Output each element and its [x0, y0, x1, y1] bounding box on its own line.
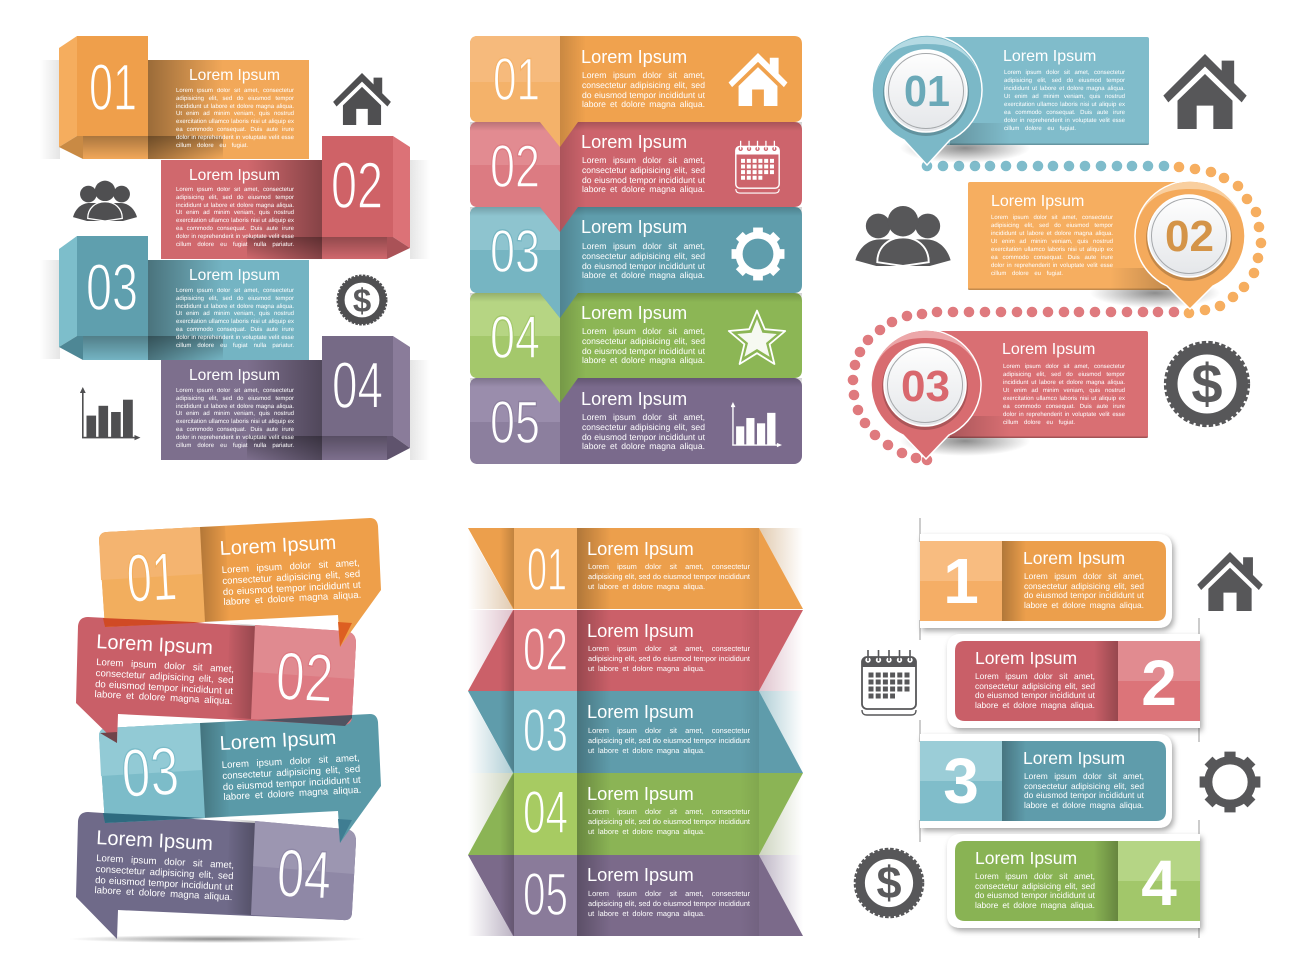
body text: do eiusmod tempor incididunt ut: [582, 346, 705, 356]
number 1: 1: [943, 545, 979, 617]
icon: coin: $: [1191, 352, 1223, 415]
body text: [588, 644, 750, 676]
body text: [222, 754, 362, 807]
title: Lorem Ipsum: [587, 783, 694, 804]
body text: [94, 658, 234, 711]
body text: dolor in reprehenderit in voluptate velit esse: [176, 234, 294, 240]
body text: incididunt ut labore et dolore magna aliqua.: [176, 304, 294, 310]
panel: location pins with dotted path, top right: [848, 35, 1266, 465]
body text: consectetur adipisicing elit, sed: [1024, 781, 1144, 791]
body text: [588, 562, 750, 594]
body text: consectetur adipisicing elit, sed: [975, 681, 1095, 691]
title: Lorem Ipsum: [219, 727, 337, 755]
body text: [176, 88, 294, 154]
title: Lorem Ipsum: [1002, 341, 1095, 358]
body text: ea commodo consequat. Duis aute irure: [991, 255, 1113, 261]
title: Lorem Ipsum: [96, 827, 213, 855]
title: Lorem Ipsum: [581, 47, 687, 67]
card 03: [871, 330, 1148, 459]
body text: incididunt ut labore et dolore magna aliqua.: [1003, 380, 1125, 386]
tab 05: [470, 378, 802, 464]
body text: dolor in reprehenderit in voluptate velit esse: [1004, 118, 1125, 124]
body text: ea commodo consequat. Duis aute irure: [1004, 110, 1125, 116]
number 01: 01: [527, 536, 567, 603]
body text: consectetur adipisicing elit, sed: [582, 422, 705, 432]
body text: consectetur adipisicing elit, sed: [975, 881, 1095, 891]
body text: ut labore et dolore magna aliqua.: [588, 664, 705, 673]
body text: [991, 214, 1113, 282]
tab 02: [470, 122, 802, 232]
number 3: 3: [943, 745, 979, 817]
ribbon 02: [468, 610, 803, 691]
body text: cillum dolore eu fugiat nulla pariatur.: [176, 343, 294, 349]
title: Lorem Ipsum: [581, 389, 687, 409]
title: Lorem Ipsum: [219, 532, 337, 560]
number 02: 02: [523, 616, 568, 683]
pin 01: 01: [904, 67, 950, 116]
body text: ut labore et dolore magna aliqua.: [588, 746, 705, 755]
body text: [975, 872, 1095, 914]
body text: Ut enim ad minim veniam, quis nostrud: [991, 239, 1113, 245]
tab 4: [947, 834, 1200, 928]
title: Lorem Ipsum: [587, 620, 694, 641]
tab 1: [920, 534, 1172, 628]
body text: labore et dolore magna aliqua.: [582, 355, 705, 365]
number 04: 04: [523, 779, 568, 846]
body text: consectetur adipisicing elit, sed: [222, 569, 360, 587]
body text: labore et dolore magna aliqua.: [1024, 800, 1144, 810]
body text: ea commodo consequat. Duis aute irure: [176, 226, 294, 232]
tab 04: [470, 293, 802, 403]
icon: house: [729, 53, 787, 106]
icon: coin: [337, 275, 387, 325]
dotted path: [848, 161, 1266, 465]
body text: consectetur adipisicing elit, sed: [582, 80, 705, 90]
body text: ut labore et dolore magna aliqua.: [588, 909, 705, 918]
body text: labore et dolore magna aliqua.: [94, 885, 233, 904]
body text: consectetur adipisicing elit, sed: [582, 165, 705, 175]
body text: exercitation ullamco laboris nisi ut aliquip ex: [1003, 396, 1125, 402]
icon: people: [73, 181, 137, 221]
body text: incididunt ut labore et dolore magna aliqua.: [176, 404, 294, 410]
ribbon 03: [468, 691, 803, 773]
body text: adipisicing elit, sed do eiusmod tempor: [176, 195, 294, 201]
body text: cillum dolore eu fugiat.: [991, 271, 1063, 277]
ribbon 01: [468, 528, 803, 609]
body text: Lorem ipsum dolor sit amet, consectetur: [588, 807, 750, 816]
tab 01: [470, 36, 802, 147]
body text: ut labore et dolore magna aliqua.: [588, 827, 705, 836]
tab 03: [470, 207, 802, 318]
body text: [1003, 363, 1125, 431]
icon: people: [855, 206, 951, 266]
bubble 04: [76, 812, 356, 939]
body text: [588, 726, 750, 758]
body text: Lorem ipsum dolor sit amet, consectetur: [176, 288, 294, 294]
panel: origami banners, top left: [40, 36, 430, 460]
number 2: 2: [1141, 647, 1177, 719]
pin 02: 02: [1165, 212, 1214, 261]
title: Lorem Ipsum: [189, 67, 280, 84]
icon: star: [729, 311, 785, 364]
title: Lorem Ipsum: [991, 193, 1084, 210]
body text: adipisicing elit, sed do eiusmod tempor incididunt: [588, 899, 750, 908]
title: Lorem Ipsum: [1003, 48, 1096, 65]
body text: do eiusmod tempor incididunt ut: [1024, 790, 1144, 800]
icon: calendar: [862, 650, 916, 715]
title: Lorem Ipsum: [1023, 748, 1125, 768]
body text: labore et dolore magna aliqua.: [582, 441, 705, 451]
body text: do eiusmod tempor incididunt ut: [975, 690, 1095, 700]
body text: labore et dolore magna aliqua.: [582, 184, 705, 194]
icon: coin: $: [353, 282, 371, 319]
icon: gear: [732, 228, 784, 280]
tab 3: [920, 734, 1172, 828]
body text: adipisicing elit, sed do eiusmod tempor incididunt: [588, 572, 750, 581]
pin 03: [871, 330, 981, 459]
body text: [1024, 772, 1144, 814]
ribbon 04: [468, 773, 803, 855]
body text: Lorem ipsum dolor sit amet, consectetur: [588, 889, 750, 898]
number 01: 01: [493, 46, 540, 113]
banner 03: [40, 236, 309, 360]
body text: exercitation ullamco laboris nisi ut aliquip ex: [176, 218, 294, 224]
number 02: 02: [490, 133, 540, 200]
number 02: 02: [331, 148, 383, 222]
body text: do eiusmod tempor incididunt ut: [95, 679, 233, 697]
banner 02: [161, 136, 430, 259]
number 04: 04: [275, 835, 333, 914]
icon: calendar: [736, 141, 779, 193]
body text: [176, 187, 294, 253]
body text: adipisicing elit, sed do eiusmod tempor: [1004, 78, 1125, 84]
body text: consectetur adipisicing elit, sed: [582, 251, 705, 261]
body text: Ut enim ad minim veniam, quis nostrud: [1004, 94, 1125, 100]
panel: tilted speech bubbles, bottom left: [69, 518, 381, 943]
title: Lorem Ipsum: [587, 538, 694, 559]
body text: ea commodo consequat. Duis aute irure: [176, 327, 294, 333]
body text: cillum dolore eu fugiat.: [1004, 126, 1076, 132]
body text: cillum dolore eu fugiat nulla pariatur.: [176, 242, 294, 248]
icon: bar chart: [80, 387, 140, 440]
body text: adipisicing elit, sed do eiusmod tempor: [176, 396, 294, 402]
body text: [582, 327, 705, 369]
title: Lorem Ipsum: [581, 217, 687, 237]
title: Lorem Ipsum: [189, 267, 280, 284]
title: Lorem Ipsum: [96, 631, 213, 659]
number 03: 03: [490, 218, 540, 285]
body text: do eiusmod tempor incididunt ut: [582, 90, 705, 100]
tab 2: [947, 634, 1200, 728]
body text: Lorem ipsum dolor sit amet, consectetur: [176, 187, 294, 193]
body text: adipisicing elit, sed do eiusmod tempor: [176, 296, 294, 302]
number 04: 04: [332, 348, 383, 422]
body text: [176, 388, 294, 454]
body text: adipisicing elit, sed do eiusmod tempor: [1003, 372, 1125, 378]
body text: [94, 854, 234, 907]
body text: dolor in reprehenderit in voluptate velit esse: [176, 135, 294, 141]
body text: [588, 889, 750, 921]
body text: cillum dolore eu fugiat.: [176, 143, 248, 149]
icon: coin: $: [876, 857, 902, 908]
body text: [1024, 572, 1144, 614]
icon: bar chart: [730, 402, 782, 447]
body text: [975, 672, 1095, 714]
title: Lorem Ipsum: [587, 701, 694, 722]
body text: adipisicing elit, sed do eiusmod tempor incididunt: [588, 817, 750, 826]
body text: do eiusmod tempor incididunt ut: [582, 175, 705, 185]
body text: dolor in reprehenderit in voluptate velit esse: [991, 263, 1113, 269]
number 03: 03: [120, 733, 181, 812]
pin 01: [872, 35, 982, 165]
body text: exercitation ullamco laboris nisi ut aliquip ex: [991, 247, 1113, 253]
body text: incididunt ut labore et dolore magna aliqua.: [176, 104, 294, 110]
body text: cillum dolore eu fugiat nulla pariatur.: [176, 443, 294, 449]
body text: do eiusmod tempor incididunt ut: [1024, 590, 1144, 600]
ribbon 05: [468, 855, 803, 936]
body text: ea commodo consequat. Duis aute irure: [1003, 404, 1125, 410]
bubble 02: [76, 617, 356, 743]
body text: consectetur adipisicing elit, sed: [1024, 581, 1144, 591]
title: Lorem Ipsum: [587, 864, 694, 885]
body text: adipisicing elit, sed do eiusmod tempor incididunt: [588, 654, 750, 663]
body text: dolor in reprehenderit in voluptate velit esse: [1003, 412, 1125, 418]
number 03: 03: [86, 250, 138, 324]
number 05: 05: [523, 861, 568, 928]
body text: labore et dolore magna aliqua.: [223, 785, 362, 803]
panel: white-framed tabs, bottom right: [855, 518, 1263, 938]
overlap with bubble 04: [103, 813, 352, 843]
number 01: 01: [89, 50, 137, 124]
body text: Lorem ipsum dolor sit amet, consectetur: [176, 88, 294, 94]
body text: do eiusmod tempor incididunt ut: [223, 579, 361, 598]
body text: Lorem ipsum dolor sit amet, consectetur: [588, 726, 750, 735]
icon: gear: [1200, 752, 1260, 812]
body text: incididunt ut labore et dolore magna aliqua.: [991, 231, 1113, 237]
body text: adipisicing elit, sed do eiusmod tempor: [176, 96, 294, 102]
bubble 01: [99, 518, 381, 647]
pin 03: 03: [901, 362, 950, 411]
body text: Lorem ipsum dolor sit amet, consectetur: [176, 388, 294, 394]
body text: ea commodo consequat. Duis aute irure: [176, 127, 294, 133]
title: Lorem Ipsum: [189, 367, 280, 384]
body text: labore et dolore magna aliqua.: [582, 270, 705, 280]
body text: ea commodo consequat. Duis aute irure: [176, 427, 294, 433]
body text: do eiusmod tempor incididunt ut: [582, 432, 705, 442]
number 01: 01: [125, 538, 179, 617]
overlap with bubble 02: [103, 618, 352, 647]
body text: [222, 559, 362, 612]
number 04: 04: [490, 304, 540, 371]
body text: Lorem ipsum dolor sit amet, consectetur: [588, 562, 750, 571]
title: Lorem Ipsum: [189, 167, 280, 184]
number 05: 05: [490, 389, 540, 456]
body text: exercitation ullamco laboris nisi ut aliquip ex: [176, 419, 294, 425]
title: Lorem Ipsum: [581, 303, 687, 323]
card 02: [968, 181, 1245, 309]
icon: coin: [1165, 342, 1249, 426]
body text: consectetur adipisicing elit, sed: [582, 336, 705, 346]
body text: labore et dolore magna aliqua.: [582, 99, 705, 109]
title: Lorem Ipsum: [975, 848, 1077, 868]
card 01: [872, 35, 1149, 165]
body text: do eiusmod tempor incididunt ut: [95, 875, 233, 893]
panel: stacked tabs, top centre: [470, 36, 802, 464]
body text: consectetur adipisicing elit, sed: [222, 764, 360, 782]
body text: adipisicing elit, sed do eiusmod tempor: [991, 223, 1113, 229]
body text: [176, 288, 294, 354]
body text: cillum dolore eu fugiat.: [1003, 420, 1075, 426]
body text: exercitation ullamco laboris nisi ut aliquip ex: [1004, 102, 1125, 108]
body text: adipisicing elit, sed do eiusmod tempor incididunt: [588, 736, 750, 745]
number 02: 02: [274, 638, 335, 717]
body text: [582, 413, 705, 455]
body text: [1004, 69, 1125, 137]
body text: consectetur adipisicing elit, sed: [95, 668, 234, 686]
icon: coin: [855, 849, 923, 917]
body text: Lorem ipsum dolor sit amet, consectetur: [991, 215, 1113, 221]
body text: exercitation ullamco laboris nisi ut aliquip ex: [176, 119, 294, 125]
body text: do eiusmod tempor incididunt ut: [223, 774, 361, 793]
body text: Lorem ipsum dolor sit amet, consectetur: [1004, 70, 1125, 76]
body text: Lorem ipsum dolor sit amet, consectetur: [588, 644, 750, 653]
panel: chevron ribbons, bottom centre: [468, 528, 803, 936]
body text: incididunt ut labore et dolore magna aliqua.: [176, 203, 294, 209]
body text: do eiusmod tempor incididunt ut: [975, 890, 1095, 900]
icon: house: [333, 73, 391, 125]
body text: labore et dolore magna aliqua.: [975, 700, 1095, 710]
body text: dolor in reprehenderit in voluptate velit esse: [176, 335, 294, 341]
body text: [582, 156, 705, 198]
title: Lorem Ipsum: [1023, 548, 1125, 568]
body text: [582, 71, 705, 113]
banner 04: [161, 336, 430, 460]
banner 01: [40, 36, 309, 159]
body text: incididunt ut labore et dolore magna aliqua.: [1004, 86, 1125, 92]
body text: labore et dolore magna aliqua.: [1024, 600, 1144, 610]
body text: ut labore et dolore magna aliqua.: [588, 582, 705, 591]
body text: do eiusmod tempor incididunt ut: [582, 261, 705, 271]
body text: [582, 242, 705, 284]
body text: labore et dolore magna aliqua.: [223, 590, 362, 608]
body text: exercitation ullamco laboris nisi ut aliquip ex: [176, 319, 294, 325]
bubble 03: [99, 714, 381, 843]
body text: Ut enim ad minim veniam, quis nostrud: [176, 411, 294, 417]
body text: Ut enim ad minim veniam, quis nostrud: [176, 111, 294, 117]
title: Lorem Ipsum: [581, 132, 687, 152]
body text: Lorem ipsum dolor sit amet, consectetur: [1003, 364, 1125, 370]
pin 02: [1135, 181, 1245, 309]
number 4: 4: [1141, 847, 1177, 919]
number 03: 03: [523, 697, 568, 764]
body text: Ut enim ad minim veniam, quis nostrud: [176, 210, 294, 216]
icon: house: [1197, 552, 1263, 611]
body text: consectetur adipisicing elit, sed: [95, 864, 234, 882]
body text: dolor in reprehenderit in voluptate velit esse: [176, 435, 294, 441]
overlap with bubble 03: [100, 715, 352, 743]
title: Lorem Ipsum: [975, 648, 1077, 668]
body text: labore et dolore magna aliqua.: [975, 900, 1095, 910]
body text: Ut enim ad minim veniam, quis nostrud: [1003, 388, 1125, 394]
icon: house: [1163, 54, 1247, 129]
body text: labore et dolore magna aliqua.: [94, 689, 233, 708]
body text: [588, 807, 750, 839]
body text: Ut enim ad minim veniam, quis nostrud: [176, 311, 294, 317]
